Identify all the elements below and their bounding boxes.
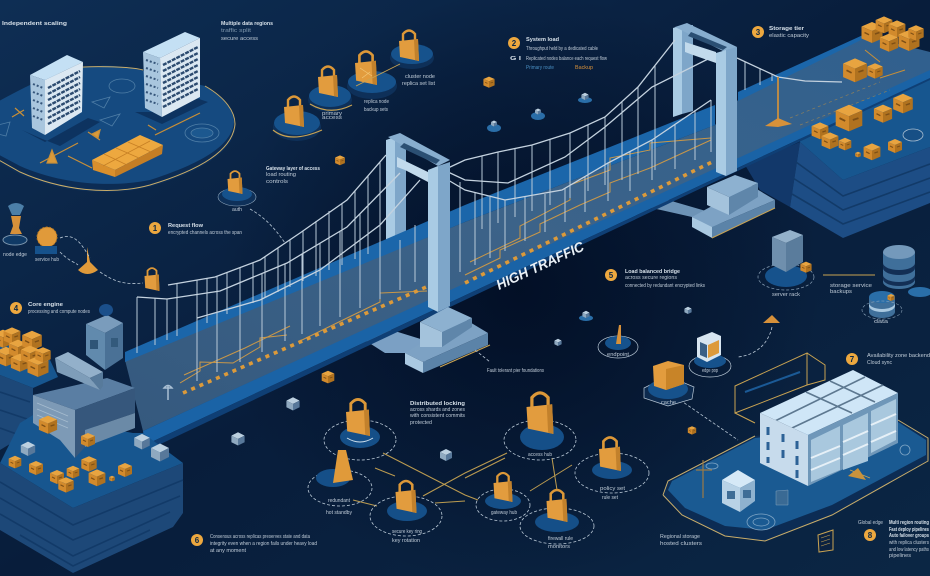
text block: regions note: traffic split — [221, 28, 252, 34]
roadway post — [164, 386, 172, 400]
padlock row labels: replica set list — [402, 81, 435, 87]
padlock row labels: backup sets — [364, 107, 388, 113]
left pedestal blocks — [405, 307, 490, 373]
callout: building note: Availability zone backend — [867, 353, 930, 359]
padlock: gateway with dashed link: auth — [232, 207, 242, 213]
callout: numbered note left: encrypted channels across the span — [168, 230, 242, 236]
platform icons — [706, 445, 910, 530]
padlock f: gateway hub — [491, 510, 517, 516]
padlock c — [370, 481, 442, 544]
bridge main cables — [137, 40, 842, 318]
padlock: gateway with dashed link — [218, 171, 285, 243]
node: orange crate: cache — [661, 400, 676, 406]
text block: access gateway: load routing — [266, 172, 296, 178]
node: kiosk: edge pop — [702, 368, 718, 374]
bridge: rear columns — [386, 25, 693, 240]
padlock e: rule set — [602, 495, 618, 501]
utility pole — [696, 460, 712, 498]
gold connectors — [12, 108, 200, 168]
bridge title on deck: HIGH TRAFFIC — [494, 238, 587, 293]
text block: regions note — [221, 21, 273, 42]
text block: network description — [409, 401, 466, 426]
text block: network description: across shards and zones — [410, 407, 465, 413]
padlock network — [308, 393, 649, 550]
callout: bottom-right note — [858, 520, 929, 559]
bridge hangers — [137, 62, 772, 381]
building shadows — [22, 96, 208, 146]
server on disc: server rack — [772, 292, 800, 298]
text block: bridge caption: 5 — [609, 271, 614, 280]
text block: regions note: Multiple data regions — [221, 21, 273, 27]
callout: bottom centre note: Consensus across replicas preserves state and data — [210, 534, 311, 540]
node: orange crate — [644, 361, 694, 406]
icon group: row of padlocks on platforms — [273, 30, 435, 141]
text block: platform caption: Regional storage — [660, 534, 700, 540]
server on disc — [758, 230, 875, 298]
small panel — [776, 490, 788, 505]
text block: bridge caption: connected by redundant encrypted links — [625, 283, 705, 289]
heading: data centre note: Independent scaling — [2, 21, 68, 27]
main building — [760, 370, 898, 486]
text block: access gateway: controls — [266, 179, 288, 185]
pedestal: rear slabs — [360, 200, 730, 362]
padlock e: policy set — [600, 486, 625, 492]
small floating icons centre right — [231, 307, 780, 461]
panel: lower-left cliff with factory — [0, 304, 183, 573]
panel: bottom-right data centre platform — [663, 370, 928, 541]
icon: chip frame — [818, 530, 833, 552]
padlock 4 — [390, 30, 434, 69]
air handler — [55, 352, 103, 390]
right pedestal blocks — [692, 175, 775, 238]
text block: network description: with consistent commits — [409, 413, 465, 419]
panel: top centre note: Replicated nodes balance each request flow — [526, 56, 608, 62]
padlock d — [504, 393, 576, 460]
bridge deck — [125, 35, 930, 449]
node: small padlock centre right: endpoint — [607, 352, 629, 358]
orange items on cliff — [9, 416, 132, 493]
padlock row labels: access — [322, 115, 342, 121]
padlock d: access hub — [528, 452, 552, 458]
text block: bridge caption: Load balanced bridge — [625, 269, 680, 275]
padlock g — [520, 490, 594, 550]
orange cluster: left stack — [0, 327, 51, 377]
text block: network description: protected — [410, 420, 432, 426]
callout: numbered note left: 1 — [153, 224, 158, 233]
padlock 1 — [273, 96, 322, 141]
panel: top-left data centre platform — [0, 32, 236, 192]
text block: platform caption — [660, 534, 702, 547]
padlock row labels: replica node — [364, 99, 389, 105]
padlock 3 — [347, 51, 397, 99]
padlock 2 — [308, 66, 352, 112]
wireframe transfer box — [735, 353, 825, 423]
panel: top centre note — [508, 37, 608, 71]
text block: network description: Distributed locking — [410, 401, 466, 407]
padlock e — [575, 437, 649, 501]
cargo cluster on deck and cliff — [812, 16, 924, 160]
callout: bottom-right note: Global edge — [858, 520, 883, 526]
icon group: upper left gear chain: node edge — [3, 252, 27, 258]
padlock f — [476, 473, 530, 521]
callout: lower-left note — [10, 302, 90, 315]
callout: bottom-right note: pipelines — [889, 553, 911, 559]
icon group: upper left gear chain — [3, 203, 160, 291]
icon group: upper left gear chain: service hub — [35, 257, 59, 263]
icons: small floating nodes — [483, 77, 592, 132]
callout: building note: Cloud sync — [867, 360, 892, 366]
callout: numbered note left — [149, 222, 242, 236]
callout: building note — [846, 353, 930, 366]
server on disc: backups — [830, 289, 852, 295]
callout: lower-left note: 4 — [14, 304, 19, 313]
map icons on platform — [0, 79, 219, 142]
server on disc: storage service — [830, 283, 872, 289]
network links — [353, 453, 572, 506]
padlock b: hot standby — [326, 510, 352, 516]
padlock a — [324, 399, 396, 460]
panel: top centre note: 2 — [512, 39, 517, 48]
panel: top centre note: Backup — [575, 65, 593, 71]
text block: bridge caption: across secure regions — [625, 275, 677, 281]
padlock row labels: cluster node — [405, 74, 435, 80]
building: right tower — [143, 32, 200, 117]
bridge right tower — [675, 23, 775, 238]
padlock c: key rotation — [392, 538, 420, 544]
building: left tower — [30, 55, 83, 135]
circuit traces on deck — [180, 82, 890, 393]
callout: bottom centre note: 6 — [195, 536, 200, 545]
text block: regions note: secure access — [221, 36, 258, 42]
callout: building note: 7 — [850, 355, 855, 364]
tower unit — [86, 304, 123, 370]
icon: small orange marker — [335, 155, 345, 165]
padlock g: monitors — [548, 544, 570, 550]
database cylinder large — [883, 245, 930, 297]
padlock g: firewall rule — [548, 536, 573, 542]
callout: lower-left note: Core engine — [28, 302, 63, 308]
text block: bridge caption — [605, 269, 705, 289]
database cylinder small: data — [874, 319, 889, 325]
padlock b: redundant — [328, 498, 350, 504]
callout: bottom centre note: at any moment — [210, 548, 246, 554]
panel: top centre note: System load — [526, 37, 560, 43]
padlock b — [308, 450, 372, 516]
callout: top right note: 3 — [756, 28, 761, 37]
panel: top centre note: Primary route — [526, 65, 554, 71]
factory block — [33, 378, 135, 458]
callout: top right note: elastic capacity — [769, 33, 809, 39]
anchor pole on right span — [765, 77, 792, 127]
callout: bottom-right note: 8 — [868, 531, 873, 540]
padlock row labels: primary — [322, 111, 342, 117]
padlock c: secure key ring — [392, 529, 422, 535]
gold storage block — [92, 135, 163, 177]
callout: top right note — [752, 26, 809, 39]
panel: top centre note: Throughput held by a dedicated cable — [526, 46, 598, 52]
bridge left tower — [388, 133, 490, 373]
panel: right cliff block — [745, 72, 930, 238]
small cube building — [722, 470, 755, 512]
database cylinder small — [862, 291, 902, 325]
callout: bottom centre note — [191, 534, 317, 554]
text block: access gateway — [266, 166, 320, 185]
text block: platform caption: hosted clusters — [660, 541, 702, 547]
text block: pier caption: Fault tolerant pier foundations — [487, 368, 544, 374]
text block: access gateway: Gateway layer of access — [266, 166, 320, 172]
padlock row labels — [322, 74, 435, 121]
callout: bottom centre note: integrity even when a region fails under heavy load — [210, 541, 317, 547]
panel: top centre note: G I — [510, 56, 522, 62]
callout: top right note: Storage tier — [769, 26, 805, 32]
callout: lower-left note: processing and compute nodes — [28, 309, 90, 315]
node: kiosk — [689, 332, 731, 377]
grey icons on cliff — [21, 434, 169, 462]
callout: numbered note left: Request flow — [168, 223, 204, 229]
node: small padlock centre right — [598, 325, 638, 358]
